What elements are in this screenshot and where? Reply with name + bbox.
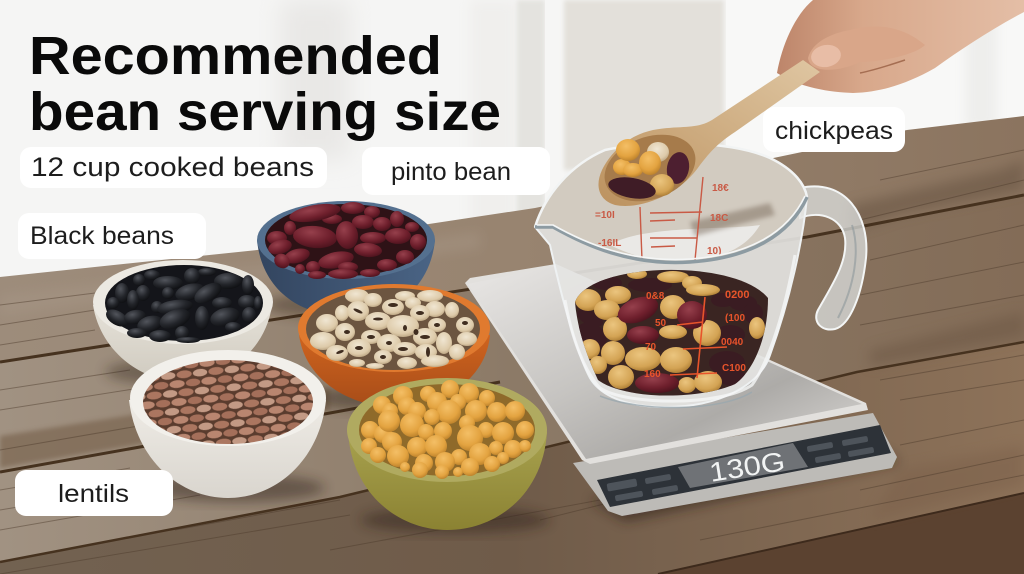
measurement marks: 10) [707, 246, 721, 257]
label: black beans [18, 213, 206, 259]
measurement marks: -16IL [598, 238, 621, 249]
pinto bean bowl [298, 284, 490, 411]
measurement marks: 50 [655, 318, 667, 329]
label: lentils: lentils [58, 480, 129, 508]
measurement marks: C100 [722, 363, 746, 374]
scale display: 130G [707, 446, 787, 488]
label: serving size [20, 147, 327, 188]
measurement marks: 0&8 [646, 291, 665, 302]
window background [0, 0, 1024, 300]
glass body [535, 143, 807, 407]
measurement marks: 160 [644, 369, 661, 380]
title [29, 26, 501, 142]
wooden table [0, 116, 1024, 574]
measurement marks [595, 177, 749, 380]
measurement marks: (100 [725, 313, 745, 324]
measuring cup [535, 143, 866, 408]
label: black beans: Black beans [30, 222, 174, 250]
measurement marks: 0200 [725, 289, 749, 301]
label: lentils [15, 470, 173, 516]
hand [777, 0, 1024, 93]
black bean bowl [93, 260, 275, 386]
scale display [678, 443, 808, 488]
measurement marks: =10I [595, 210, 615, 221]
cup handle [800, 186, 866, 330]
kitchen scale [465, 264, 900, 522]
chickpea bowl [347, 378, 550, 533]
label: pinto bean [362, 147, 550, 195]
measurement marks: 18€ [712, 183, 729, 194]
thumb [808, 26, 925, 73]
cup interior [535, 143, 807, 262]
lentil bowl [129, 350, 326, 502]
label: chickpeas [763, 107, 905, 152]
label: chickpeas: chickpeas [775, 117, 893, 145]
cup rim [535, 143, 807, 408]
kidney bean bowl [257, 201, 435, 319]
title: Recommended [29, 26, 442, 86]
wooden spoon [595, 60, 820, 213]
measurement marks: 70 [645, 342, 657, 353]
measurement marks: 18C [710, 213, 728, 224]
measurement marks: 0040 [721, 337, 744, 348]
label: serving size: 12 cup cooked beans [31, 152, 314, 182]
label: pinto bean: pinto bean [391, 158, 511, 186]
title: bean serving size [29, 82, 501, 142]
beans in cup [575, 270, 768, 396]
